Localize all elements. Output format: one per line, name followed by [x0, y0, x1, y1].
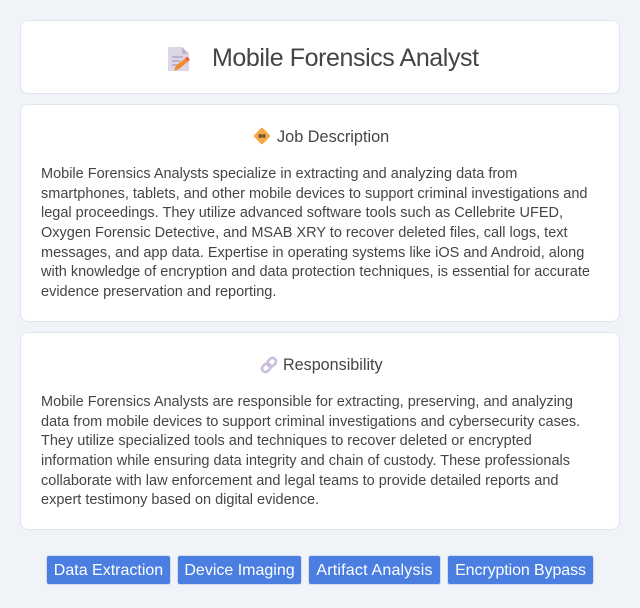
text: responsibility body: expert testimony based on digital evidence. [41, 492, 319, 508]
icon: orange diamond [254, 128, 270, 144]
text: job description body: Mobile Forensics Analysts specialize in extracting and analyzing data from [41, 166, 517, 182]
text: job description body: evidence preservation and reporting. [41, 284, 276, 300]
icon: document with pencil [168, 47, 190, 71]
panel: title [20, 20, 620, 94]
text: responsibility body: collaborate with law enforcement and legal teams to provide detailed reports and [41, 473, 558, 489]
text: responsibility body: information while ensuring data integrity and chain of custody. These professionals [41, 453, 570, 469]
text: responsibility body: data from mobile devices to support criminal investigations and cybersecurity cases. [41, 414, 580, 430]
tag: Encryption Bypass: Encryption Bypass [455, 562, 586, 579]
text: job description body: with knowledge of encryption and data protection techniques, is essential for accurate [41, 264, 590, 280]
text: responsibility body: Mobile Forensics Analysts are responsible for extracting, preserving, and analyzing [41, 394, 573, 410]
tag: Data Extraction: Data Extraction [54, 562, 163, 579]
text: job description body [41, 166, 590, 300]
text: job description body: Oxygen Forensic Detective, and MSAB XRY to recover deleted files, call logs, text [41, 225, 568, 241]
text: responsibility body [41, 394, 580, 508]
tag: Encryption Bypass [447, 555, 594, 585]
tag: Artifact Analysis [308, 555, 441, 585]
text: job description body: smartphones, tablets, and other mobile devices to support criminal investigations and [41, 186, 587, 202]
tag: Device Imaging: Device Imaging [184, 562, 295, 579]
tag: Artifact Analysis: Artifact Analysis [316, 562, 433, 579]
icon: chain link [260, 356, 278, 374]
panel: job description [20, 104, 620, 322]
text: job description body: legal proceedings. They utilize advanced software tools such as Cellebrite UFED, [41, 205, 563, 221]
heading: Mobile Forensics Analyst: Mobile Forensics Analyst [212, 44, 479, 72]
heading: Responsibility: Responsibility [283, 356, 383, 374]
tag: Device Imaging [177, 555, 302, 585]
tag: Data Extraction [46, 555, 171, 585]
text: responsibility body: They utilize specialized tools and techniques to recover deleted or encrypted [41, 433, 532, 449]
panel: responsibility [20, 332, 620, 530]
heading: Job Description: Job Description [277, 128, 389, 146]
text: job description body: messages, and app data. Expertise in operating systems like iOS and Android, along [41, 245, 584, 261]
